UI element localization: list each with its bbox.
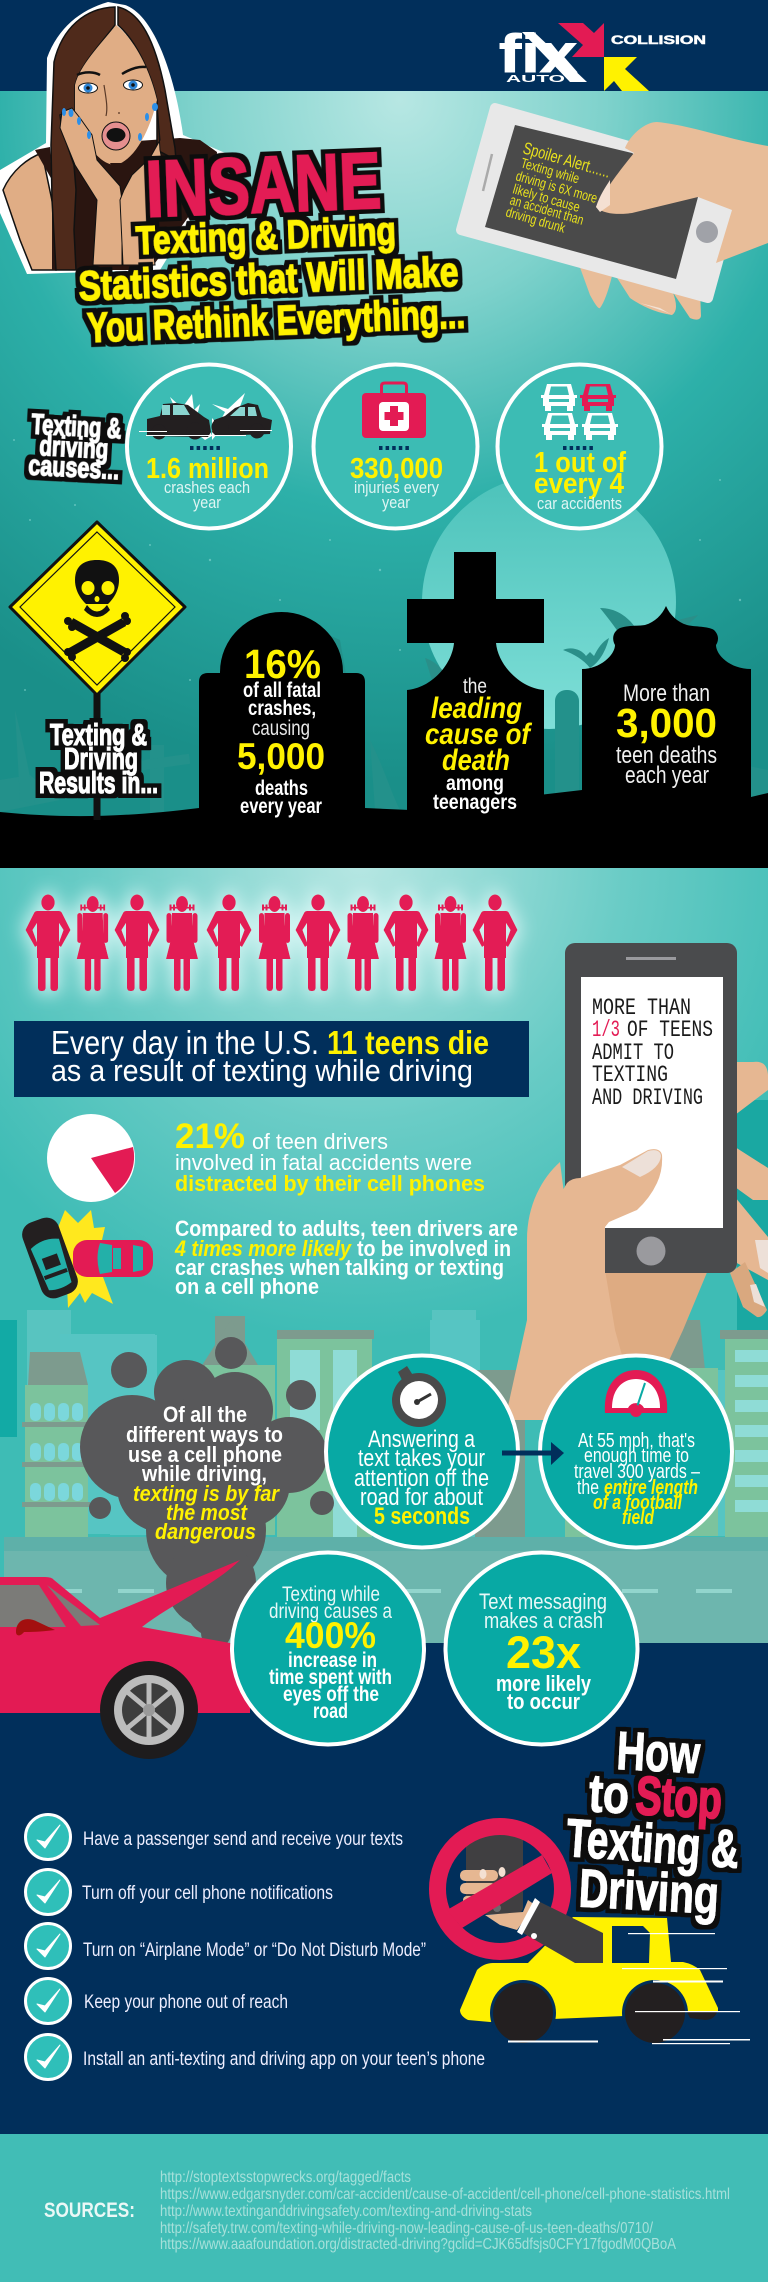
stat circle: 23x: makes a crash — [484, 1608, 603, 1633]
stat circle: accidents — [498, 364, 662, 528]
icon: collision of two cars — [18, 1210, 153, 1308]
stat circle: football field: field — [622, 1507, 655, 1529]
stat circle: 400 percent: eyes off the — [283, 1683, 379, 1706]
stat circle: 400 percent: time spent with — [269, 1666, 392, 1689]
text block: 4 times more likely: on a cell phone — [175, 1274, 319, 1299]
label: Texting & Driving Results in: Driving — [64, 741, 138, 776]
icon: no phone sign with hand — [438, 1826, 603, 1963]
stat circle: injuries: year — [382, 493, 410, 512]
phone text: more than 1/3 of teens: MORE THAN — [592, 995, 691, 1021]
thumb — [560, 1149, 662, 1275]
smoke cloud with text: different ways to — [126, 1422, 283, 1447]
phone text: spoiler alert: Spoiler Alert...... — [521, 139, 613, 182]
gravestone: 16 percent: every year — [240, 795, 322, 818]
gravestone: leading cause: the — [463, 675, 487, 698]
text block: 4 times more likely: car crashes when talking or texting — [175, 1255, 504, 1280]
dots divider — [563, 446, 593, 450]
icon: speedometer — [605, 1370, 667, 1417]
tip 2: Turn off your cell phone notifications — [82, 1883, 333, 1904]
gravestone: 3000 deaths: each year — [625, 762, 709, 789]
stat circle: accidents: every 4 — [534, 468, 624, 500]
smoke cloud with text: use a cell phone — [128, 1442, 282, 1467]
stat circle: accidents: car accidents — [537, 494, 622, 513]
phone text: spoiler alert: Texting while — [519, 155, 581, 186]
stat circle: crashes: 1.6 million — [146, 453, 269, 485]
navy lower section — [0, 1643, 768, 2134]
title line: Texting & Driving: Texting & Driving — [135, 209, 397, 263]
header band — [0, 0, 768, 91]
phone text: spoiler alert: likely to cause — [511, 181, 582, 215]
stat circle: football field: the — [577, 1477, 599, 1499]
stat circle: answering a text: 5 seconds — [374, 1503, 470, 1530]
phone text: more than 1/3 of teens: AND DRIVING — [592, 1085, 703, 1111]
bats — [425, 608, 698, 682]
sources list: http://www.textinganddrivingsafety.com/texting-and-driving-stats — [160, 2203, 532, 2220]
label: Texting & Driving Results in: Results in... — [39, 765, 158, 800]
gravestone: 3000 deaths: 3,000 — [616, 700, 717, 746]
tip 3 — [26, 1924, 426, 1968]
stat circle: 400 percent: 400% — [285, 1615, 376, 1656]
stat circle: answering a text — [326, 1356, 518, 1548]
smoke cloud with text: while driving, — [141, 1461, 267, 1486]
icon: skull and crossbones — [64, 560, 131, 662]
text block: 4 times more likely: 4 times more likely — [174, 1236, 353, 1261]
dots divider — [190, 446, 220, 450]
tip 4: Keep your phone out of reach — [84, 1992, 288, 2013]
logo: Fix Auto Collision — [499, 23, 706, 91]
phone text: spoiler alert: driving drunk — [504, 204, 568, 236]
background graveyard silhouettes — [0, 622, 768, 815]
row of 11 teen figures — [26, 894, 518, 991]
smoke cloud with text: Of all the — [163, 1402, 247, 1427]
smoke cloud with text: dangerous — [155, 1519, 256, 1544]
gravestone: leading cause: leading — [431, 692, 522, 725]
heading: how to stop texting and driving: Stop — [634, 1766, 723, 1830]
illustration: shocked woman — [0, 2, 230, 274]
gravestone: 16 percent: 16% — [244, 641, 321, 687]
banner: 11 teens die — [14, 1021, 529, 1097]
text block: 4 times more likely: to be involved in — [357, 1236, 511, 1261]
stat circle: answering a text: attention off the — [354, 1465, 489, 1492]
label: Texting & Driving Results in — [39, 717, 158, 800]
text block: 21 percent distracted — [175, 1117, 485, 1196]
stat circle: football field: travel 300 yards – — [574, 1461, 701, 1483]
text block: 4 times more likely — [174, 1216, 518, 1299]
label: Texting & driving causes: Texting & — [31, 409, 122, 445]
city skyline — [0, 1310, 768, 1540]
tip 5: Install an anti-texting and driving app on your teen’s phone — [83, 2049, 485, 2070]
heading: how to stop texting and driving: to — [587, 1763, 631, 1825]
text block: 21 percent distracted: of teen drivers — [252, 1129, 388, 1154]
banner: 11 teens die: 11 teens die — [327, 1024, 489, 1061]
heading: how to stop texting and driving — [564, 1721, 741, 1926]
moon — [422, 475, 676, 729]
car wheel — [100, 1661, 198, 1759]
stat circle: answering a text: road for about — [360, 1484, 483, 1511]
gravestone: leading cause: teenagers — [433, 791, 517, 814]
smoke cloud with text — [80, 1337, 334, 1648]
tip 1 — [26, 1814, 403, 1860]
heading: how to stop texting and driving: How — [615, 1721, 702, 1785]
logo: Fix Auto Collision: COLLISION — [611, 33, 706, 47]
logo: Fix Auto Collision: AUTO — [506, 74, 565, 85]
logo: Fix Auto Collision: fix — [499, 24, 577, 84]
warning sign — [10, 522, 185, 820]
gravestone: leading cause — [407, 552, 544, 830]
stat circle: 23x: to occur — [507, 1689, 580, 1714]
illustration: hand holding phone with spoiler alert — [461, 108, 768, 320]
gravestone: 3000 deaths: teen deaths — [616, 742, 717, 769]
tip 3: Turn on “Airplane Mode” or “Do Not Disturb Mode” — [83, 1940, 426, 1961]
pie chart: 21 percent — [47, 1114, 135, 1202]
icon: four cars, one red — [541, 384, 618, 440]
stat circle: 23x — [446, 1552, 638, 1744]
stat circle: 400 percent: road — [313, 1700, 348, 1723]
tip 2 — [26, 1870, 333, 1914]
text block: 21 percent distracted: involved in fatal accidents were — [175, 1150, 472, 1175]
dots divider — [379, 446, 409, 450]
stat circle: answering a text: Answering a — [368, 1426, 476, 1453]
sources list: http://safety.trw.com/texting-while-driving-now-leading-cause-of-us-teen-deaths/0710/ — [160, 2220, 653, 2237]
stat circle: crashes: year — [193, 493, 221, 512]
stat circle: answering a text: text takes your — [358, 1445, 485, 1472]
gravestone: 16 percent — [199, 612, 365, 825]
gravestone: 3000 deaths — [582, 606, 751, 830]
stat circle: 23x: Text messaging — [479, 1589, 607, 1614]
text block: 4 times more likely: Compared to adults, teen drivers are — [175, 1216, 518, 1241]
gravestone: 3000 deaths: More than — [623, 680, 710, 707]
tip 5 — [26, 2034, 485, 2080]
title line: Rethink: You Rethink Everything... — [86, 290, 466, 351]
stat circle: injuries: 330,000 — [350, 453, 443, 485]
stat circle: football field: of a football — [593, 1492, 682, 1514]
road — [0, 1537, 768, 1643]
stat circle: 400 percent: increase in — [288, 1649, 377, 1672]
stat circle: injuries — [314, 364, 478, 528]
decorative stars — [13, 439, 741, 691]
gravestone: 16 percent: 5,000 — [237, 736, 325, 777]
stat circle: 23x: more likely — [496, 1671, 592, 1696]
smoke cloud with text: texting is by far — [133, 1481, 280, 1506]
gravestone: 16 percent: causing — [252, 717, 310, 740]
phone text: spoiler alert: driving is 6X more — [514, 168, 599, 206]
smoke cloud with text: the most — [166, 1500, 248, 1525]
illustration: yellow car — [460, 1917, 750, 2046]
stat circle: football field: At 55 mph, that's — [578, 1430, 695, 1452]
label: Texting & driving causes — [28, 409, 122, 486]
phone text: more than 1/3 of teens: 1/3 — [592, 1017, 620, 1043]
sources list — [160, 2169, 730, 2253]
label: Texting & Driving Results in: Texting & — [50, 717, 147, 752]
sources panel — [0, 2134, 768, 2282]
text block: 21 percent distracted: 21% — [175, 1117, 245, 1156]
illustration: red car with open hood — [0, 1560, 250, 1759]
sources list: http://stoptextsstopwrecks.org/tagged/facts — [160, 2169, 411, 2186]
stat circle: 400 percent: driving causes a — [269, 1600, 392, 1623]
title: INSANE: INSANE — [144, 136, 382, 234]
stat circle: football field — [540, 1356, 732, 1548]
icon: crashing cars — [139, 393, 272, 440]
gravestone: 16 percent: deaths — [255, 777, 308, 800]
tips checklist — [26, 1814, 485, 2080]
phone text: more than 1/3 of teens — [592, 995, 713, 1111]
banner: 11 teens die: Every day in the U.S. — [51, 1024, 319, 1061]
section two background — [0, 868, 768, 1643]
stat circle: football field: entire length — [604, 1477, 698, 1499]
stat circle: injuries: injuries every — [354, 478, 439, 497]
arrow — [502, 1442, 564, 1465]
stat circle: football field: enough time to — [584, 1445, 689, 1467]
stat circle: accidents: 1 out of — [534, 447, 626, 479]
gravestone: leading cause: cause of — [425, 718, 533, 751]
text block: 21 percent distracted: distracted by their cell phones — [175, 1171, 485, 1196]
heading: how to stop texting and driving: Driving — [577, 1858, 720, 1926]
label: Texting & driving causes: causes... — [28, 450, 120, 486]
phone text: more than 1/3 of teens: ADMIT TO — [592, 1040, 674, 1066]
icon: first aid kit — [362, 383, 426, 438]
banner: 11 teens die: as a result of texting while driving — [51, 1053, 473, 1088]
phone text: more than 1/3 of teens: TEXTING — [592, 1062, 668, 1088]
illustration: hand holding big phone — [505, 943, 768, 1420]
stat circle: 23x: 23x — [506, 1627, 581, 1678]
tip 1: Have a passenger send and receive your texts — [83, 1829, 403, 1850]
stat circle: crashes — [127, 364, 291, 528]
label: Texting & driving causes: driving — [39, 430, 109, 466]
icon: stopwatch — [392, 1366, 446, 1427]
phone text: spoiler alert — [504, 139, 613, 236]
stat circle: 400 percent: Texting while — [282, 1583, 380, 1606]
title line: Statistics: Statistics that Will Make — [78, 248, 459, 309]
ground silhouette — [0, 790, 768, 868]
gravestone: 16 percent: of all fatal — [243, 679, 321, 702]
phone text: spoiler alert: an accident than — [508, 192, 586, 228]
stat circle: crashes: crashes each — [164, 478, 250, 497]
gravestone: leading cause: death — [442, 744, 510, 777]
hero background — [0, 91, 768, 871]
gravestone: leading cause: among — [446, 772, 504, 795]
sources label: SOURCES: — [44, 2199, 135, 2222]
gravestone: 16 percent: crashes, — [248, 697, 316, 720]
tip 4 — [26, 1978, 288, 2024]
stat circle: 400 percent — [232, 1552, 424, 1744]
title — [73, 133, 466, 351]
phone text: more than 1/3 of teens: OF TEENS — [627, 1017, 713, 1043]
